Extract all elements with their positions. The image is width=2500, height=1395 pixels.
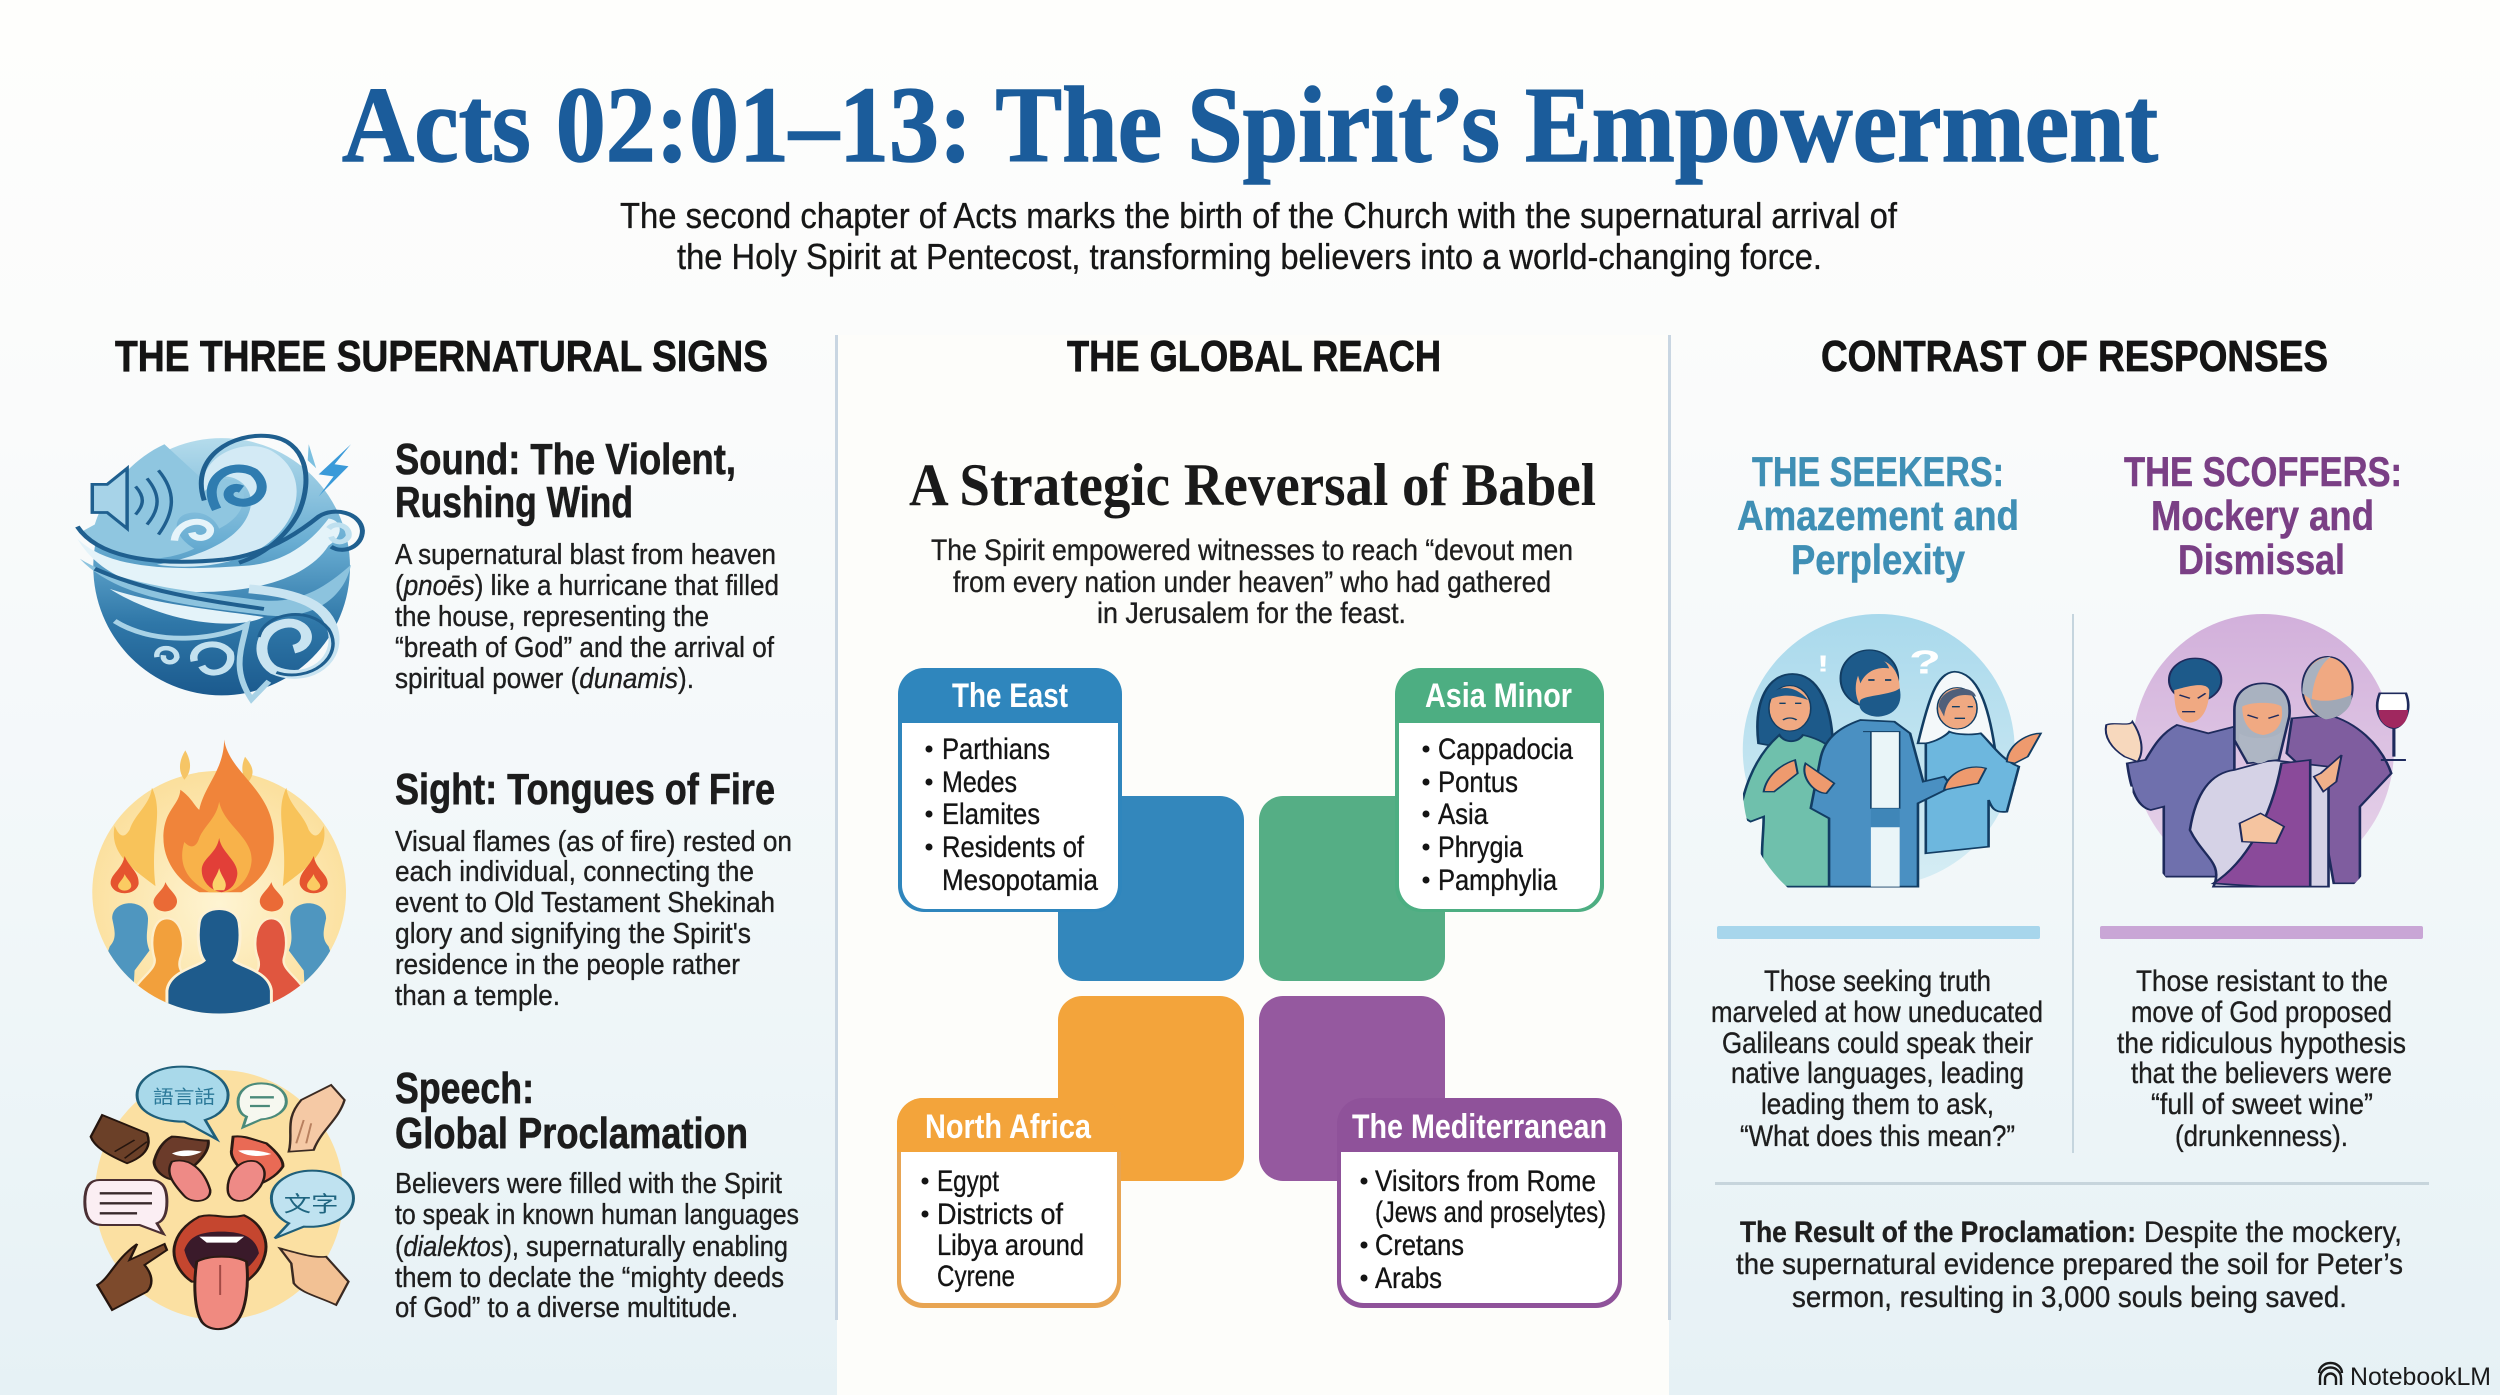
card: the east: Medes [942, 766, 1017, 799]
text: result of the proclamation: sermon, resulting in 3,000 souls being saved. [1792, 1281, 2347, 1314]
square: blue [1058, 796, 1244, 981]
heading: contrast: CONTRAST OF RESPONSES [1821, 332, 2328, 381]
icon: seekers illustration: ? [1909, 644, 1941, 681]
text: speech body: (dialektos), supernaturally enabling [395, 1231, 788, 1263]
text: result of the proclamation: The Result of the Proclamation: [1740, 1216, 2136, 1249]
text: sight body: residence in the people rather [395, 949, 740, 981]
card: north africa: Egypt [937, 1165, 1000, 1198]
square: purple [1259, 996, 1445, 1181]
text: speech body: them to declate the “mighty deeds [395, 1262, 784, 1294]
card: the east: Parthians [942, 733, 1050, 766]
text: speech body: Believers were filled with the Spirit [395, 1168, 782, 1200]
text: reversal intro: in Jerusalem for the feast. [1097, 597, 1406, 630]
icon: tongues of fire [92, 740, 346, 1015]
text: reversal intro: from every nation under heaven” who had gathered [953, 566, 1551, 599]
text: sound body: (pnoēs) like a hurricane that filled [395, 570, 779, 602]
card: the east [898, 668, 1122, 912]
text: scoffers body: that the believers were [2131, 1057, 2392, 1090]
subtitle: the Holy Spirit at Pentecost, transforming believers into a world-changing force. [677, 236, 1822, 277]
text: sound body: spiritual power (dunamis). [395, 663, 694, 695]
card: the mediterranean: Cretans [1375, 1229, 1464, 1262]
card: north africa: Cyrene [937, 1260, 1015, 1293]
title: Acts 02:01–13: The Spirit’s Empowerment [342, 66, 2158, 185]
text: sound body: the house, representing the [395, 601, 709, 633]
text: seekers body: native languages, leading [1731, 1057, 2024, 1090]
text: sight body: than a temple. [395, 980, 560, 1012]
card: the mediterranean: (Jews and proselytes) [1375, 1196, 1606, 1229]
text: scoffers body: the ridiculous hypothesis [2117, 1027, 2406, 1060]
divider between responses [2072, 614, 2074, 1153]
card: asia minor [1395, 668, 1604, 912]
icon: wind swirl [77, 436, 362, 699]
text: sound body: A supernatural blast from heaven [395, 539, 776, 571]
text: speech body: to speak in known human languages [395, 1199, 799, 1231]
column divider right [1668, 335, 1671, 1320]
card: the mediterranean: Visitors from Rome [1375, 1165, 1596, 1198]
text: scoffers body [2117, 965, 2406, 1153]
card: the east: Elamites [942, 798, 1040, 831]
text: seekers body [1711, 965, 2043, 1153]
heading: the scoffers: Mockery and [2151, 492, 2374, 539]
text: speech heading: Global Proclamation [395, 1109, 748, 1158]
panel: three supernatural signs [77, 332, 799, 1329]
text: sight body: event to Old Testament Shekinah [395, 887, 775, 919]
card: the east: The East [952, 677, 1068, 715]
card: asia minor: Cappadocia [1438, 733, 1573, 766]
subtitle: The second chapter of Acts marks the birth of the Church with the supernatural arrival of [620, 195, 1898, 236]
text: result of the proclamation [1736, 1216, 2403, 1314]
heading: strategic reversal: A Strategic Reversal of Babel [909, 452, 1596, 518]
subtitle [620, 195, 1898, 277]
column divider left [835, 335, 838, 1320]
text: sight body: each individual, connecting the [395, 856, 754, 888]
text: result of the proclamation: the supernatural evidence prepared the soil for Peter’s [1736, 1248, 2403, 1281]
card: north africa: Districts of [937, 1198, 1064, 1231]
text: sound body: “breath of God” and the arrival of [395, 632, 775, 664]
card: the mediterranean [1337, 1098, 1622, 1308]
card: the east: Residents of [942, 831, 1085, 864]
heading: the seekers [1737, 448, 2019, 583]
bar: seekers [1717, 926, 2040, 939]
heading: the seekers: Perplexity [1791, 536, 1966, 583]
text: speech heading: Speech: [395, 1064, 534, 1113]
card: asia minor: Asia [1438, 798, 1488, 831]
card: asia minor: Pontus [1438, 766, 1518, 799]
panel: contrast of responses [1711, 332, 2429, 1314]
text: speech body [395, 1168, 799, 1324]
text: result of the proclamation: Despite the mockery, [2144, 1216, 2402, 1249]
text: sound heading [395, 435, 736, 527]
text: scoffers body: move of God proposed [2131, 996, 2392, 1029]
text: sound heading: Sound: The Violent, [395, 435, 736, 484]
text: seekers body: Those seeking truth [1764, 965, 1991, 998]
text: speech heading [395, 1064, 748, 1158]
text: seekers body: Galileans could speak their [1722, 1027, 2033, 1060]
icon: speech mouths and bubbles: 文字 [284, 1192, 339, 1216]
card: the east: Mesopotamia [942, 864, 1098, 897]
text: sight body: Visual flames (as of fire) rested on [395, 826, 792, 858]
card: north africa: North Africa [925, 1108, 1092, 1146]
heading: the seekers: THE SEEKERS: [1752, 448, 2004, 495]
logo: NotebookLM: NotebookLM [2350, 1363, 2491, 1391]
divider above result [1715, 1182, 2429, 1185]
icon: seekers illustration [1739, 614, 2041, 887]
card: north africa [897, 1098, 1121, 1308]
heading: global reach: THE GLOBAL REACH [1067, 332, 1441, 381]
text: seekers body: leading them to ask, [1761, 1088, 1994, 1121]
centre column panel [837, 335, 1669, 1395]
icon: scoffers illustration [2106, 614, 2408, 887]
card: north africa: Libya around [937, 1229, 1084, 1262]
text: scoffers body: (drunkenness). [2175, 1120, 2348, 1153]
icon: speech mouths and bubbles [85, 1067, 353, 1329]
bar: scoffers [2100, 926, 2423, 939]
square: green [1259, 796, 1445, 981]
icon: seekers illustration: ! [1817, 650, 1829, 677]
text: sound body [395, 539, 779, 695]
heading: the scoffers: Dismissal [2178, 536, 2345, 583]
heading: the seekers: Amazement and [1737, 492, 2019, 539]
icon: speech mouths and bubbles: 語言話 [153, 1087, 215, 1108]
heading: signs: THE THREE SUPERNATURAL SIGNS [115, 332, 768, 381]
text: scoffers body: “full of sweet wine” [2151, 1088, 2373, 1121]
text: seekers body: “What does this mean?” [1740, 1120, 2015, 1153]
heading: the scoffers: THE SCOFFERS: [2124, 448, 2402, 495]
card: asia minor: Pamphylia [1438, 864, 1557, 897]
text: speech body: of God” to a diverse multitude. [395, 1292, 738, 1324]
text: reversal intro: The Spirit empowered witnesses to reach “devout men [931, 534, 1573, 567]
text: reversal intro [931, 534, 1573, 630]
card: asia minor: Phrygia [1438, 831, 1523, 864]
text: sight body: glory and signifying the Spirit's [395, 918, 751, 950]
text: scoffers body: Those resistant to the [2136, 965, 2388, 998]
card: the mediterranean: The Mediterranean [1352, 1108, 1607, 1146]
text: sound heading: Rushing Wind [395, 478, 633, 527]
text: sight heading: Sight: Tongues of Fire [395, 765, 775, 814]
heading: the scoffers [2124, 448, 2402, 583]
text: sight body [395, 826, 792, 1012]
square: orange [1058, 996, 1244, 1181]
text: seekers body: marveled at how uneducated [1711, 996, 2043, 1029]
panel: global reach [897, 332, 1622, 1308]
card: asia minor: Asia Minor [1425, 677, 1572, 715]
card: the mediterranean: Arabs [1375, 1262, 1442, 1295]
